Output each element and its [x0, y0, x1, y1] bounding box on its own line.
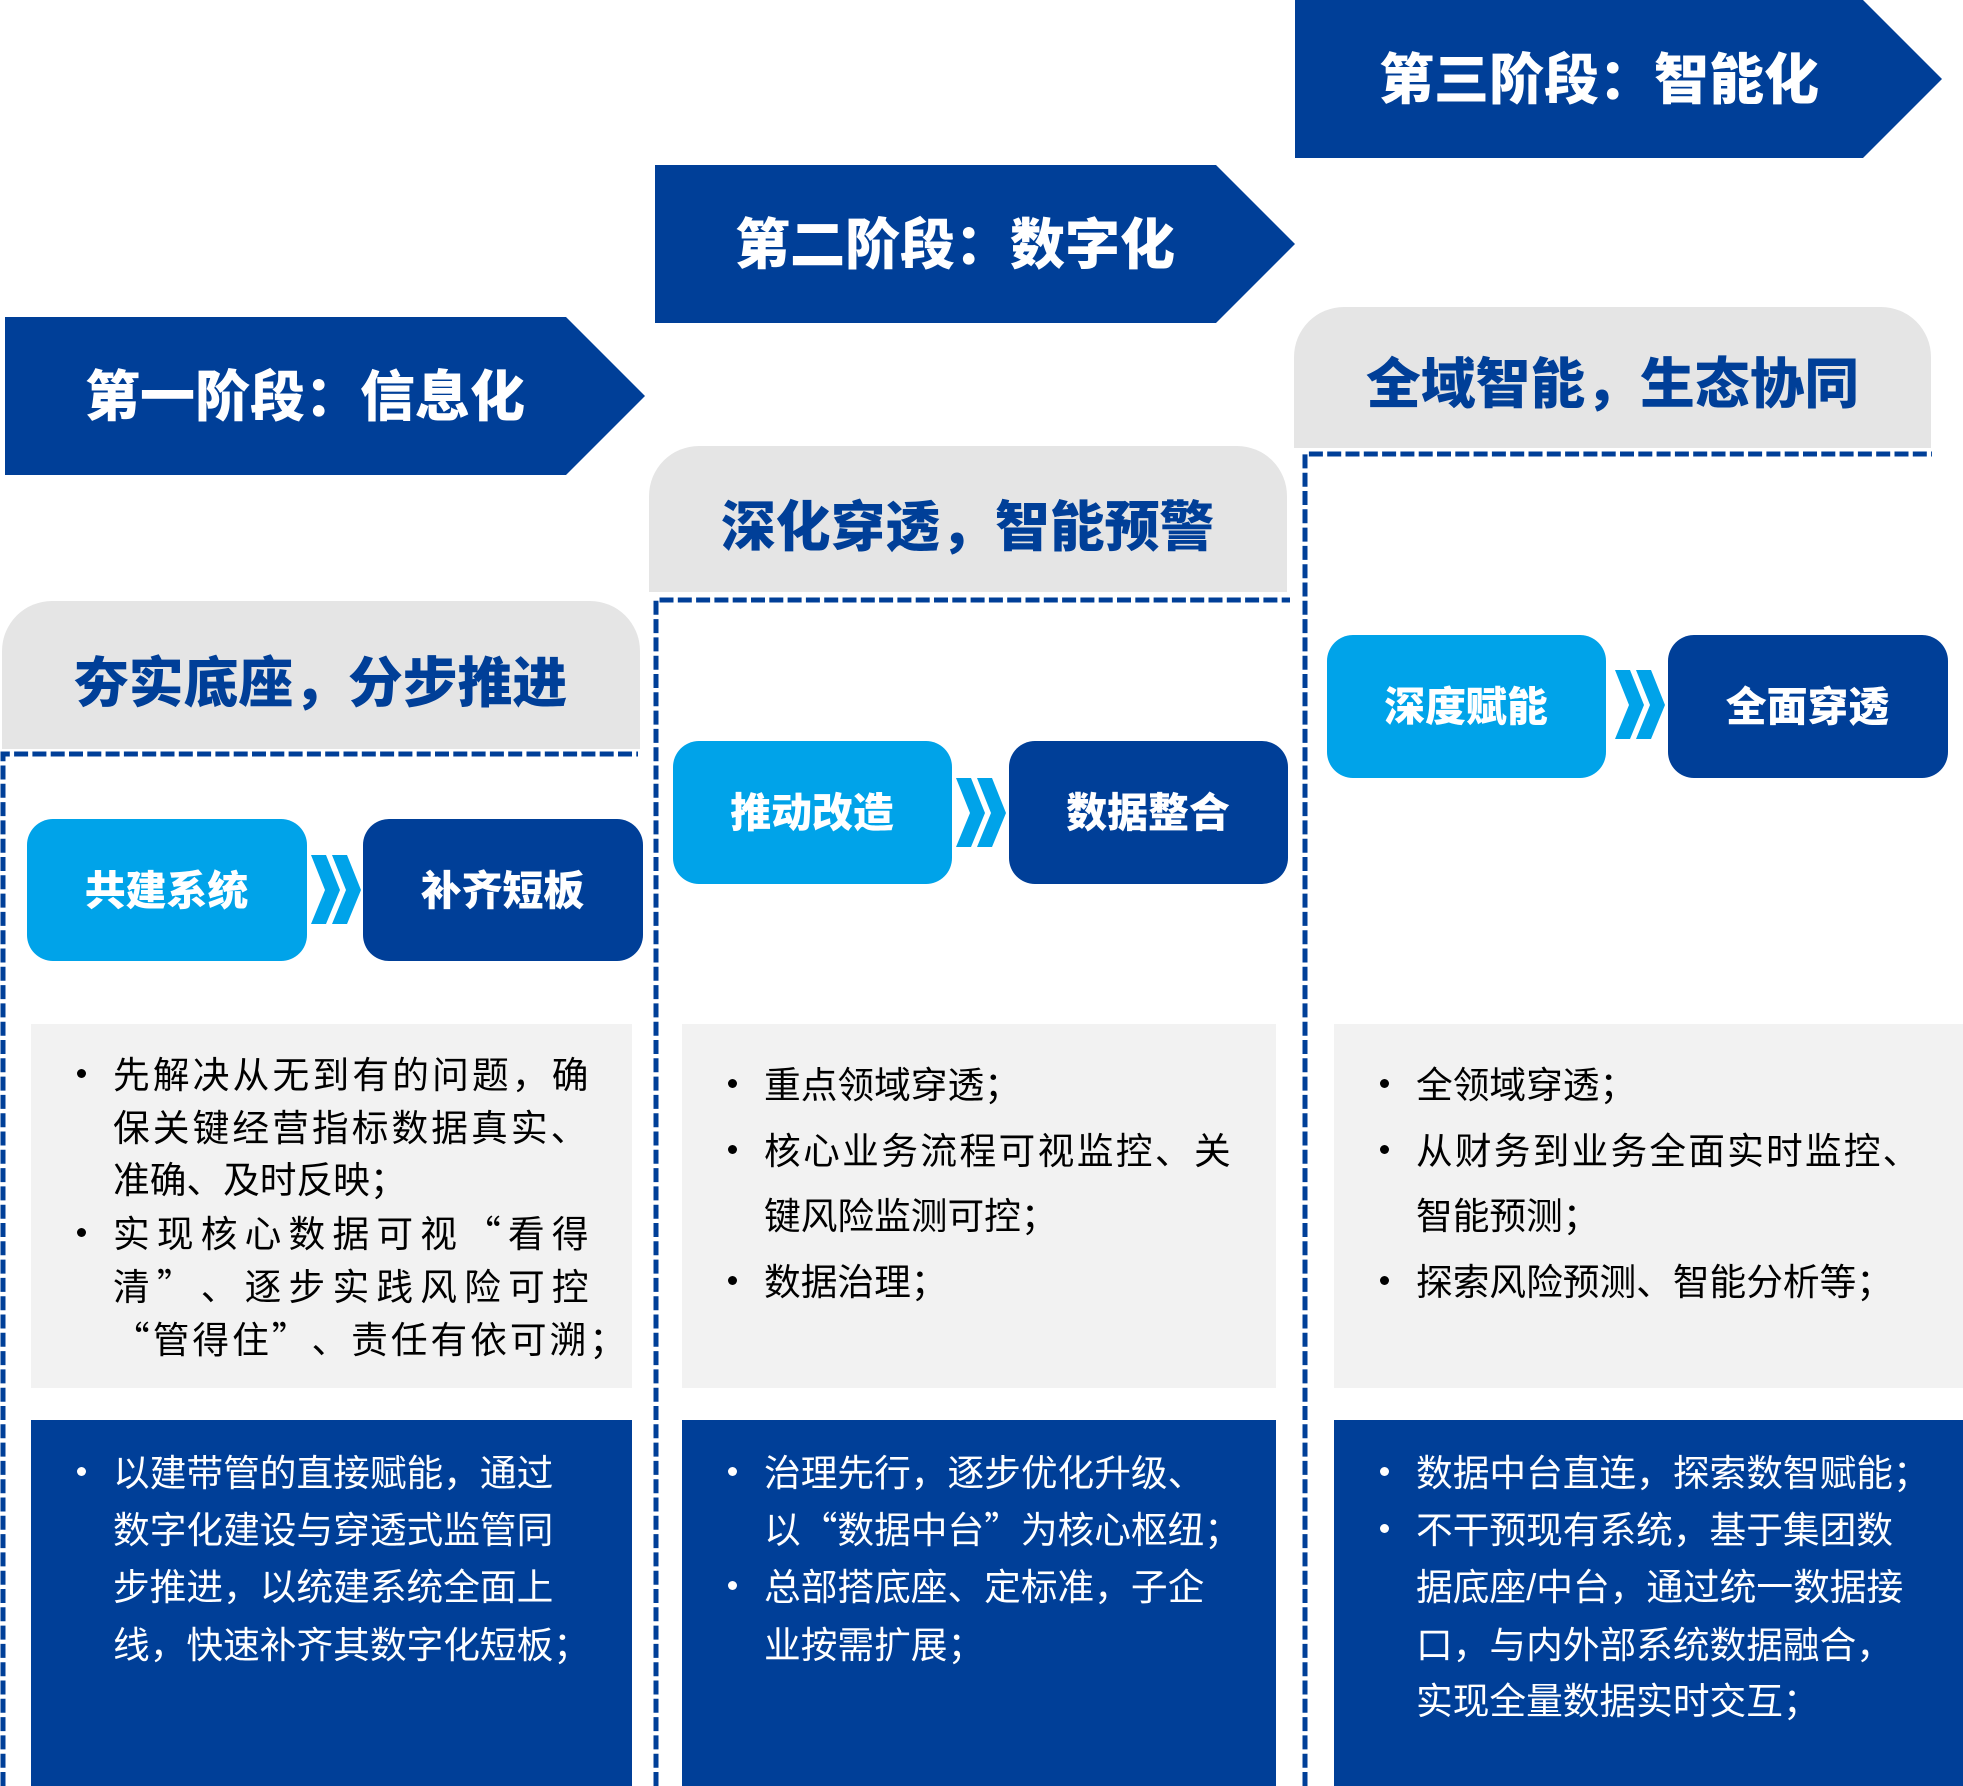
text panel: stage 2 approach: 治理先行，逐步优化升级、: [764, 1443, 1204, 1497]
text panel: stage 1 approach: 以建带管的直接赋能，通过: [113, 1443, 553, 1497]
text panel: stage 3 approach: 实现全量数据实时交互；: [1416, 1671, 1820, 1725]
text panel: stage 3 approach: 不干预现有系统，基于集团数: [1416, 1500, 1893, 1554]
text panel: stage 3 goals: 探索风险预测、智能分析等；: [1416, 1252, 1893, 1306]
icon: chevrons stage 1: [311, 855, 361, 924]
button: 数据整合: 数据整合: [1066, 780, 1230, 839]
text panel: stage 1 goals: [31, 1024, 632, 1388]
text panel: stage 3 approach: 口，与内外部系统数据融合，: [1416, 1615, 1893, 1669]
text panel: stage 2 approach: [682, 1420, 1276, 1786]
text panel: stage 2 approach: 业按需扩展；: [764, 1615, 984, 1669]
text panel: stage 3 goals: 智能预测；: [1416, 1186, 1599, 1240]
text panel: stage 2 goals: 键风险监测可控；: [764, 1186, 1058, 1240]
heading tab: stage 3: [1294, 307, 1931, 448]
text panel: stage 3 goals: 全领域穿透；: [1416, 1055, 1636, 1109]
text panel: stage 1 goals: 保关键经营指标数据真实、: [113, 1098, 590, 1152]
text panel: stage 2 goals: 重点领域穿透；: [764, 1055, 1021, 1109]
text panel: stage 1 approach: 数字化建设与穿透式监管同: [113, 1500, 553, 1554]
button: 深度赋能: [1327, 635, 1606, 778]
text panel: stage 2 approach: 总部搭底座、定标准，子企: [764, 1557, 1204, 1611]
arrow banner: stage 2: [655, 165, 1295, 323]
text panel: stage 1 approach: 线，快速补齐其数字化短板；: [113, 1615, 590, 1669]
heading tab: stage 2: [649, 446, 1287, 592]
text panel: stage 1 goals: 先解决从无到有的问题，确: [113, 1045, 592, 1099]
arrow banner: stage 2: 第二阶段：数字化: [735, 200, 1175, 280]
text panel: stage 1 goals: 清”、逐步实践风险可控: [113, 1257, 596, 1311]
text panel: stage 1 approach: [31, 1420, 632, 1786]
button: 补齐短板: 补齐短板: [421, 858, 584, 916]
button: 深度赋能: 深度赋能: [1384, 674, 1548, 733]
button: 共建系统: [27, 818, 307, 961]
button: 推动改造: 推动改造: [730, 780, 894, 839]
arrow banner: stage 3: [1295, 0, 1942, 158]
icon: chevrons stage 2: [956, 778, 1006, 847]
heading tab: stage 1: 夯实底座，分步推进: [74, 638, 567, 718]
heading tab: stage 3: 全域智能，生态协同: [1366, 339, 1859, 419]
text panel: stage 3 approach: 据底座/中台，通过统一数据接: [1416, 1557, 1903, 1611]
text panel: stage 2 goals: 数据治理；: [764, 1252, 947, 1306]
text panel: stage 3 goals: [1334, 1024, 1963, 1388]
text panel: stage 1 goals: 准确、及时反映；: [113, 1150, 407, 1204]
arrow banner: stage 3: 第三阶段：智能化: [1379, 35, 1819, 115]
arrow banner: stage 1: [5, 317, 645, 475]
text panel: stage 2 approach: 以“数据中台”为核心枢纽；: [764, 1500, 1241, 1554]
heading tab: stage 2: 深化穿透，智能预警: [721, 482, 1214, 562]
text panel: stage 3 approach: 数据中台直连，探索数智赋能；: [1416, 1443, 1930, 1497]
text panel: stage 3 approach: [1334, 1420, 1963, 1786]
text panel: stage 1 approach: 步推进，以统建系统全面上: [113, 1557, 553, 1611]
button: 全面穿透: [1668, 635, 1948, 778]
button: 补齐短板: [363, 818, 643, 961]
text panel: stage 3 goals: 从财务到业务全面实时监控、: [1416, 1121, 1922, 1175]
button: 全面穿透: 全面穿透: [1726, 674, 1889, 733]
arrow banner: stage 1: 第一阶段：信息化: [85, 352, 525, 432]
button: 共建系统: 共建系统: [85, 858, 248, 916]
text panel: stage 1 goals: “管得住”、责任有依可溯；: [113, 1310, 629, 1364]
icon: chevrons stage 3: [1615, 670, 1665, 739]
button: 推动改造: [673, 741, 952, 884]
button: 数据整合: [1009, 741, 1288, 884]
text panel: stage 2 goals: 核心业务流程可视监控、关: [764, 1121, 1233, 1175]
text panel: stage 1 goals: 实现核心数据可视“看得: [113, 1204, 596, 1258]
heading tab: stage 1: [2, 601, 640, 749]
text panel: stage 2 goals: [682, 1024, 1276, 1388]
